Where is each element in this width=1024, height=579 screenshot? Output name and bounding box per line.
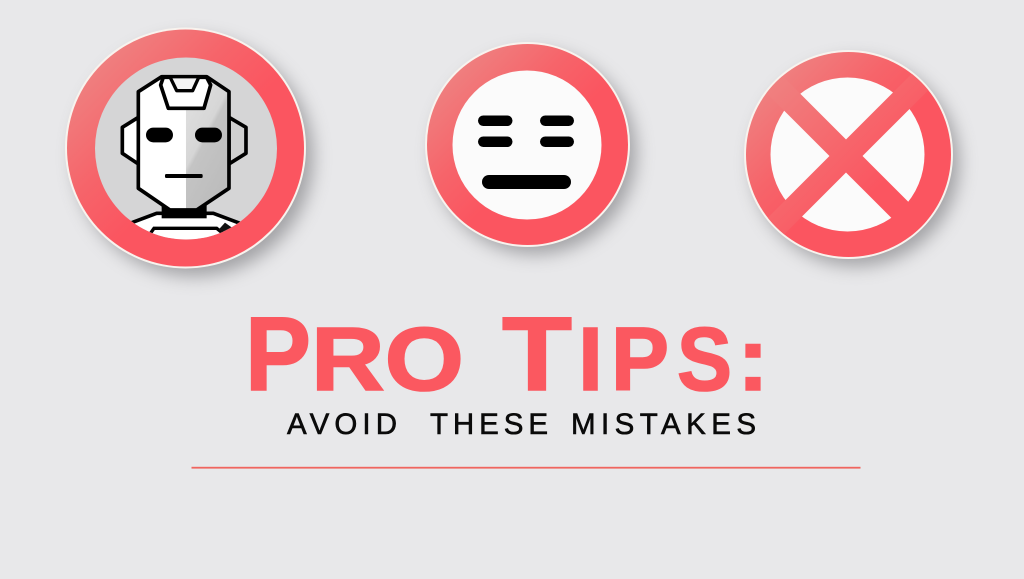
subtitle: MISTAKES — [571, 408, 756, 441]
robot shoulders — [131, 205, 240, 240]
title: T — [502, 296, 572, 413]
title: : — [737, 310, 769, 410]
robot head — [138, 77, 229, 210]
icon: robot prohibition badge — [65, 28, 313, 276]
face eyes and mouth — [478, 116, 574, 189]
x mark — [766, 74, 928, 236]
title: P — [611, 310, 669, 410]
icon: crossed-out prohibition badge — [744, 50, 959, 266]
robot ears — [122, 117, 246, 164]
icon: robot figure — [122, 77, 246, 247]
title: S — [677, 310, 732, 410]
title: I — [578, 310, 603, 410]
title: RO — [311, 310, 464, 410]
infographic canvas — [64, 28, 970, 469]
subtitle: AVOID — [287, 408, 397, 441]
icon: neutral face prohibition badge — [425, 42, 636, 254]
title: P — [245, 296, 311, 413]
subtitle: THESE — [430, 408, 548, 441]
divider line — [192, 467, 860, 469]
